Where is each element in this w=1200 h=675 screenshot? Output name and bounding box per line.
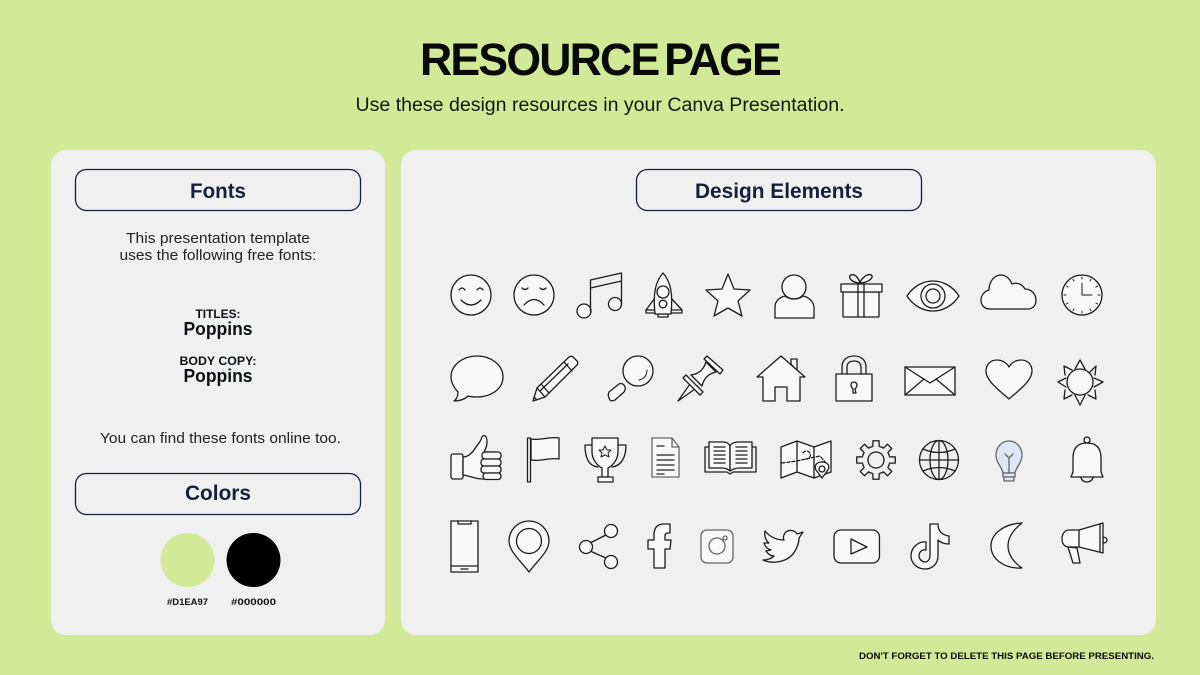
- icon: gift: [841, 275, 882, 317]
- titles font: TITLES:: [196, 307, 240, 321]
- icon: house: [757, 356, 805, 401]
- icon: cloud: [981, 275, 1036, 309]
- fonts intro text: This presentation template: [126, 231, 310, 247]
- fonts intro text: [120, 231, 316, 264]
- body copy font: BODY COPY:: [180, 354, 256, 368]
- icon: instagram: [701, 530, 733, 563]
- heading: fonts: [76, 170, 360, 210]
- icon: document: [652, 438, 679, 477]
- icon: person: [775, 275, 814, 318]
- icon: youtube: [834, 530, 880, 563]
- color swatch: green: [160, 533, 214, 608]
- icon: flag: [528, 438, 559, 482]
- icon: bell: [1071, 437, 1103, 482]
- icon: gear: [857, 441, 895, 479]
- icon: heart: [986, 360, 1032, 399]
- panel: fonts and colors: [51, 150, 385, 635]
- icon: speech bubble: [451, 356, 503, 401]
- titles font: Poppins: [184, 319, 252, 339]
- icon: envelope: [905, 367, 955, 395]
- icon: megaphone: [1062, 523, 1107, 563]
- icon: sun: [1058, 360, 1103, 405]
- panel: design elements: [401, 150, 1156, 635]
- body copy font: Poppins: [184, 366, 252, 386]
- icon: clock: [1062, 275, 1102, 315]
- icon: pushpin: [678, 356, 723, 401]
- icon: open book: [705, 442, 756, 474]
- icon: moon: [991, 523, 1022, 568]
- icon: pencil: [533, 356, 578, 401]
- title: RESOURCE PAGE: [420, 34, 781, 85]
- icon: eye: [907, 281, 959, 311]
- icon: smile: [451, 275, 491, 315]
- icon: frown: [514, 275, 554, 315]
- color swatch: green: #D1EA97: [167, 597, 208, 608]
- icon: light bulb: [996, 441, 1022, 481]
- icon: share: [580, 524, 618, 568]
- fonts note: You can find these fonts online too.: [100, 431, 341, 447]
- heading: colors: [76, 474, 360, 514]
- fonts intro text: uses the following free fonts:: [120, 248, 316, 264]
- heading: design elements: Design Elements: [695, 180, 863, 203]
- icon: trophy: [585, 438, 626, 482]
- icon: map: [781, 441, 831, 478]
- icon: twitter: [763, 530, 803, 562]
- icon: thumbs up: [451, 436, 501, 480]
- icon: facebook: [648, 524, 671, 568]
- body copy font: [180, 354, 256, 386]
- color swatch: black: [226, 533, 280, 608]
- footer note: DON'T FORGET TO DELETE THIS PAGE BEFORE PRESENTING.: [859, 651, 1154, 662]
- subtitle: Use these design resources in your Canva Presentation.: [356, 95, 844, 116]
- icon: tiktok: [911, 524, 949, 569]
- icon: rocket: [646, 273, 682, 317]
- icon: star: [706, 274, 750, 316]
- heading: colors: Colors: [185, 482, 251, 505]
- icon: music notes: [577, 273, 622, 318]
- heading: design elements: [636, 170, 922, 210]
- heading: fonts: Fonts: [190, 180, 246, 203]
- icon: magnifying glass: [608, 356, 653, 401]
- color swatch: black: #000000: [231, 597, 276, 608]
- icon: padlock: [836, 356, 872, 401]
- icon: location pin: [509, 521, 549, 572]
- icon: globe: [920, 440, 958, 480]
- titles font: [184, 307, 252, 339]
- icon: smartphone: [451, 521, 478, 572]
